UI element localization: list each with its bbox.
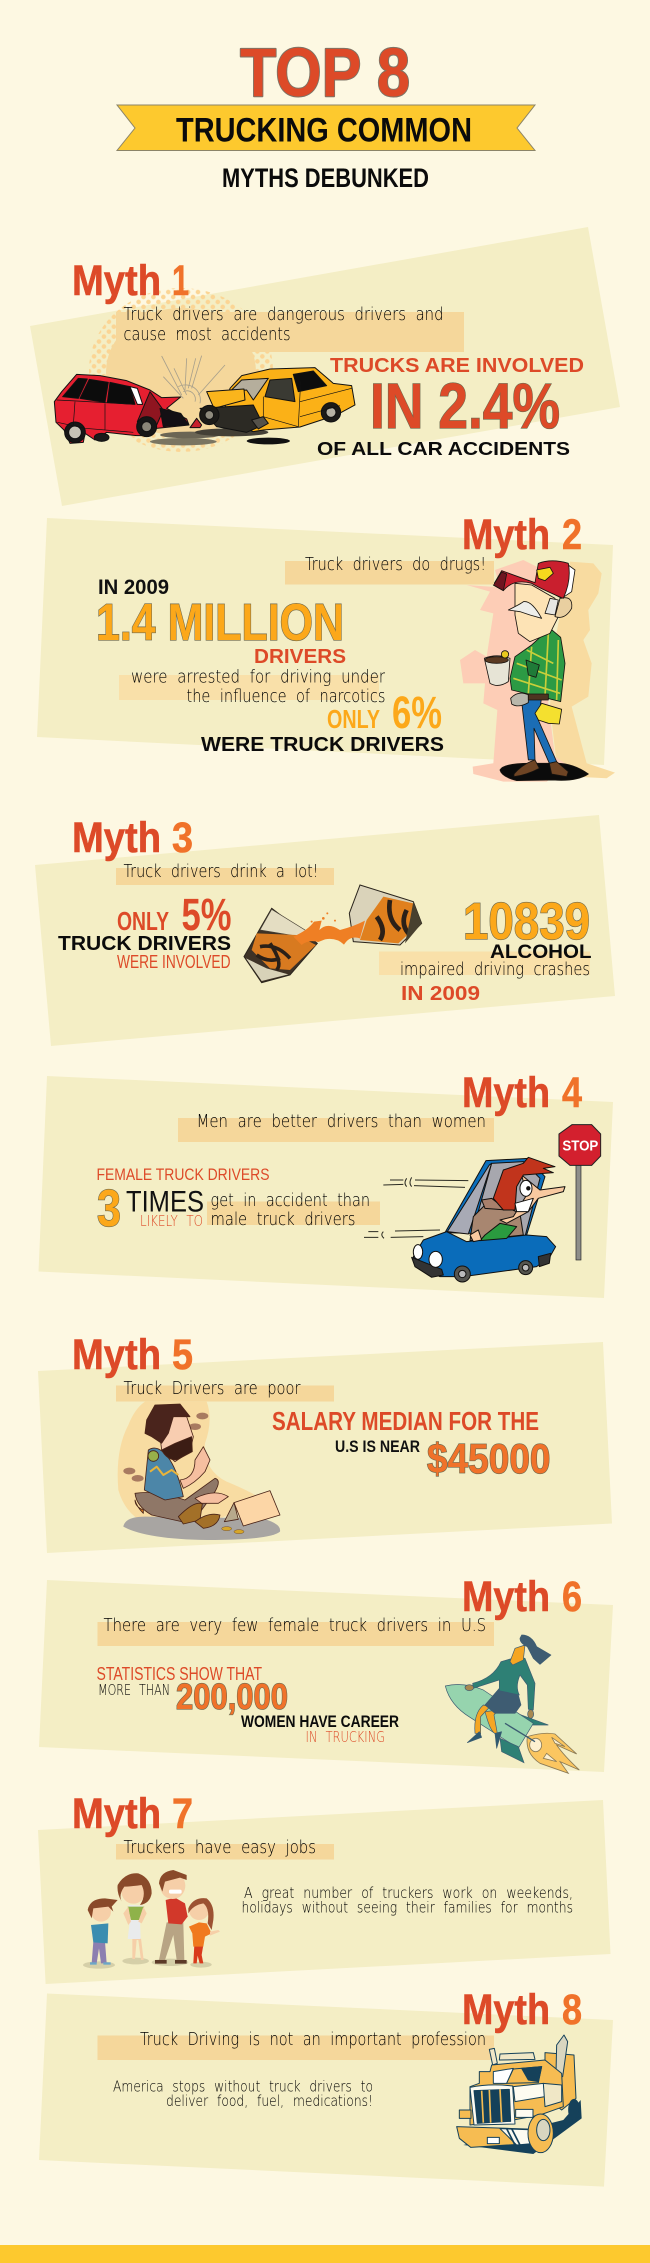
myth heading: 1 — [172, 257, 189, 305]
stat: of all car accidents: OF ALL CAR ACCIDENTS — [317, 438, 570, 459]
panel: myth 3 — [35, 814, 615, 1046]
man figure — [484, 561, 588, 781]
illustration: trucker with coffee — [460, 560, 615, 782]
myth statement band — [285, 561, 494, 584]
panel: myth 7 — [38, 1790, 610, 1984]
highlight band — [379, 952, 590, 975]
stat: salary median: SALARY MEDIAN FOR THE — [272, 1406, 539, 1436]
stat: only 5% — [117, 889, 232, 940]
text: get in accident: male truck drivers — [210, 1209, 356, 1230]
myth statement text: Truckers have easy jobs — [124, 1837, 316, 1858]
myth statement band — [116, 312, 464, 352]
subtitle: myths debunked: MYTHS DEBUNKED — [222, 163, 429, 193]
stat: $45000: $45000 — [427, 1435, 550, 1482]
myth statement text: Truck drivers are dangerous drivers and — [124, 304, 444, 325]
illustration: family — [83, 1870, 220, 1969]
silhouette shadows — [460, 560, 615, 782]
text: america stops: deliver food, fuel, medications! — [166, 2092, 373, 2110]
stat: more than: MORE THAN — [98, 1681, 170, 1699]
ground shadow — [123, 1517, 280, 1540]
boy — [88, 1898, 118, 1965]
myth statement band — [178, 1118, 494, 1142]
title: top 8: TOP 8 — [240, 34, 410, 111]
myth heading: 4 — [562, 1069, 582, 1117]
stat: statistics show: STATISTICS SHOW THAT — [96, 1664, 262, 1684]
stat: drivers: DRIVERS — [254, 646, 346, 668]
myth statement band — [98, 1622, 494, 1646]
myth heading: Myth — [72, 257, 161, 305]
text: great number of truckers: A great number of truckers work on weekends, — [244, 1884, 573, 1902]
mother — [117, 1873, 152, 1960]
text: arrested for narcotics — [131, 666, 386, 707]
splash — [293, 912, 365, 945]
stat: were truck drivers: WERE TRUCK DRIVERS — [201, 733, 444, 756]
title block — [117, 34, 535, 193]
panel: myth 1 — [30, 227, 620, 506]
illustration: car crash — [54, 356, 355, 445]
highlight band — [207, 1202, 380, 1225]
myth heading: 6 — [562, 1573, 582, 1621]
myth heading: Myth — [462, 1573, 550, 1621]
stat: were involved: WERE INVOLVED — [117, 952, 230, 972]
myth statement text: Truck drivers drink a lot! — [124, 861, 318, 882]
illustration: woman on rocket — [445, 1635, 579, 1773]
stat: truck drivers: TRUCK DRIVERS — [58, 933, 231, 955]
text: arrested for narcotics: the influence of narcotics — [186, 686, 386, 707]
myth statement band — [98, 2036, 494, 2060]
stat: 10839: 10839 — [463, 893, 590, 951]
stat: alcohol: ALCOHOL — [490, 941, 592, 963]
coins — [222, 1527, 244, 1534]
panel: myth 2 — [37, 511, 615, 782]
ground shadows — [83, 1958, 212, 1969]
flames — [527, 1733, 579, 1773]
stat: only 6% — [327, 687, 442, 738]
stat: only 6%: ONLY — [327, 704, 380, 734]
text: arrested for narcotics: were arrested for driving under — [131, 666, 385, 688]
stat: 200,000: 200,000 — [176, 1676, 288, 1717]
stat: only 5%: 5% — [182, 889, 232, 940]
stat: likely to: LIKELY TO — [140, 1212, 203, 1230]
stat: 3 times: TIMES — [126, 1186, 204, 1218]
yellow car — [200, 368, 355, 432]
rocket — [445, 1685, 548, 1763]
highlight band — [119, 675, 379, 700]
myth heading: 8 — [562, 1986, 582, 2034]
stat: only 6%: 6% — [392, 687, 442, 738]
girl — [188, 1898, 220, 1963]
text: america stops: America stops without truck drivers to — [113, 2078, 373, 2096]
illustration: whisky glasses — [244, 885, 422, 983]
stat: 1.4 million: 1.4 MILLION — [96, 594, 344, 652]
stat: 3 times — [97, 1180, 204, 1238]
myth statement text: Truck Driving is not an important profession — [140, 2029, 486, 2050]
stat: in trucking: IN TRUCKING — [306, 1728, 385, 1746]
stat: in 2009: IN 2009 — [401, 983, 480, 1005]
stop sign — [559, 1125, 601, 1260]
ribbon banner — [117, 105, 535, 150]
truck shadow — [463, 2100, 582, 2154]
illustration: truck — [457, 2035, 582, 2154]
myth heading: 2 — [562, 511, 582, 559]
myth heading: Myth — [72, 814, 161, 862]
subtitle: trucking common: TRUCKING COMMON — [176, 112, 472, 150]
myth heading: Myth — [462, 1986, 550, 2034]
illustration: stop sign and speeding car — [364, 1125, 601, 1282]
illustration: poor man — [118, 1402, 280, 1540]
stat: in 2009: IN 2009 — [98, 576, 169, 599]
myth statement band — [116, 1386, 334, 1402]
stat: female truck drivers: FEMALE TRUCK DRIVERS — [96, 1165, 270, 1184]
footer band — [0, 2245, 650, 2263]
myth statement text: cause most accidents — [124, 324, 290, 345]
myth statement text: Men are better drivers than women — [196, 1111, 486, 1132]
right glass — [349, 885, 422, 945]
text: america stops — [113, 2078, 373, 2110]
man — [135, 1404, 280, 1528]
myth heading: Myth — [72, 1331, 161, 1379]
myth heading: 7 — [172, 1790, 193, 1838]
text: get in accident: get in accident than — [210, 1190, 370, 1211]
text: get in accident — [210, 1190, 370, 1230]
panel: myth 4 — [38, 1069, 613, 1298]
woman — [465, 1635, 551, 1748]
myth heading: 3 — [172, 814, 193, 862]
myth statement text: Truck Drivers are poor — [124, 1378, 301, 1399]
oil puddles — [150, 428, 290, 445]
myth statement band — [116, 868, 334, 885]
stat: 3 times: 3 — [97, 1180, 121, 1238]
panel: myth 6 — [39, 1573, 613, 1773]
text: great number of truckers: holidays without seeing their families for months — [242, 1898, 573, 1916]
left glass — [244, 908, 317, 983]
myth heading: 5 — [172, 1331, 193, 1379]
patch marks — [123, 1413, 208, 1482]
blue car — [412, 1157, 565, 1282]
backdrop blob — [118, 1402, 265, 1523]
halftone burst — [89, 288, 273, 452]
myth heading: Myth — [462, 511, 550, 559]
red car — [54, 374, 202, 443]
myth statement band — [116, 1844, 334, 1860]
panel: myth 8 — [39, 1986, 613, 2187]
myth statement text: Truck drivers do drugs! — [305, 554, 486, 575]
stat: trucks are involved: TRUCKS ARE INVOLVED — [330, 354, 584, 377]
sleeper and stack — [489, 2035, 576, 2110]
myth statement text: There are very few female truck drivers in U.S — [104, 1615, 486, 1636]
stop sign: STOP — [562, 1139, 599, 1155]
stat: in 2.4%: IN 2.4% — [370, 370, 560, 442]
stat: women have career: WOMEN HAVE CAREER — [241, 1712, 399, 1731]
father — [155, 1870, 188, 1964]
speed lines — [364, 1177, 468, 1238]
panel: myth 5 — [38, 1331, 612, 1553]
myth heading: Myth — [462, 1069, 550, 1117]
text: impaired driving crashes: impaired driving crashes — [400, 959, 590, 980]
myth statement text — [124, 304, 444, 345]
text: great number of truckers — [242, 1884, 573, 1916]
myth heading: Myth — [72, 1790, 161, 1838]
stat: u.s is near: U.S IS NEAR — [335, 1437, 420, 1456]
stat: only 5%: ONLY — [117, 906, 169, 936]
cab — [457, 2060, 579, 2153]
